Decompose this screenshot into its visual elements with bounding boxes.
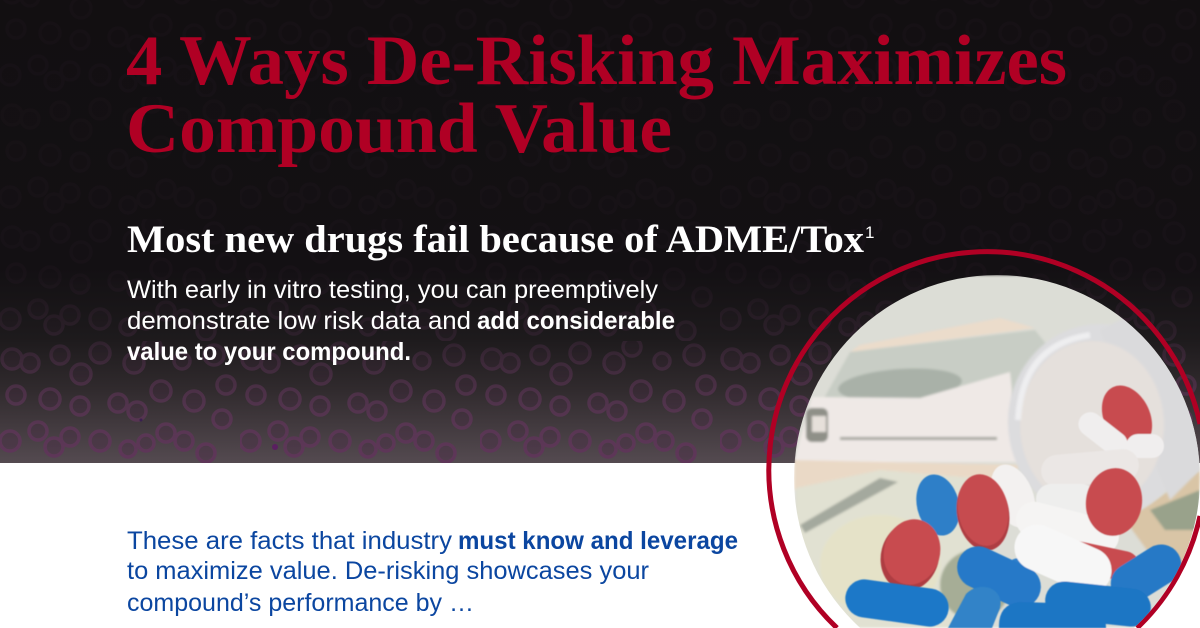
closing paragraph — [127, 527, 738, 617]
plastic bottle — [1008, 315, 1200, 520]
white lower section — [0, 463, 1200, 628]
intro paragraph: add considerable — [477, 307, 675, 335]
intro paragraph: With early in vitro testing, you can preemptively — [127, 276, 659, 304]
pills inside bottle — [992, 384, 1164, 527]
subheading: Most new drugs fail because of ADME/Tox — [127, 218, 865, 261]
title: 4 Ways De-Risking Maximizes — [126, 22, 1067, 100]
red ring around photo — [769, 252, 1200, 628]
intro paragraph — [127, 276, 675, 366]
dark header background with cell pattern — [0, 0, 1200, 463]
subheading: 1 — [865, 223, 874, 242]
photo: pills spilling from a bottle onto money — [794, 275, 1200, 628]
intro paragraph: demonstrate low risk data and — [127, 307, 471, 335]
title — [126, 22, 1067, 168]
red and blue ovals — [880, 467, 1143, 588]
intro paragraph: value to your compound. — [127, 338, 411, 366]
closing paragraph: to maximize value. De-risking showcases your — [127, 557, 649, 585]
title: Compound Value — [126, 90, 672, 168]
front pills — [844, 532, 1182, 628]
closing paragraph: These are facts that industry — [127, 527, 453, 555]
money background — [794, 275, 1200, 628]
closing paragraph: must know and leverage — [458, 527, 738, 555]
closing paragraph: compound’s performance by … — [127, 589, 474, 617]
